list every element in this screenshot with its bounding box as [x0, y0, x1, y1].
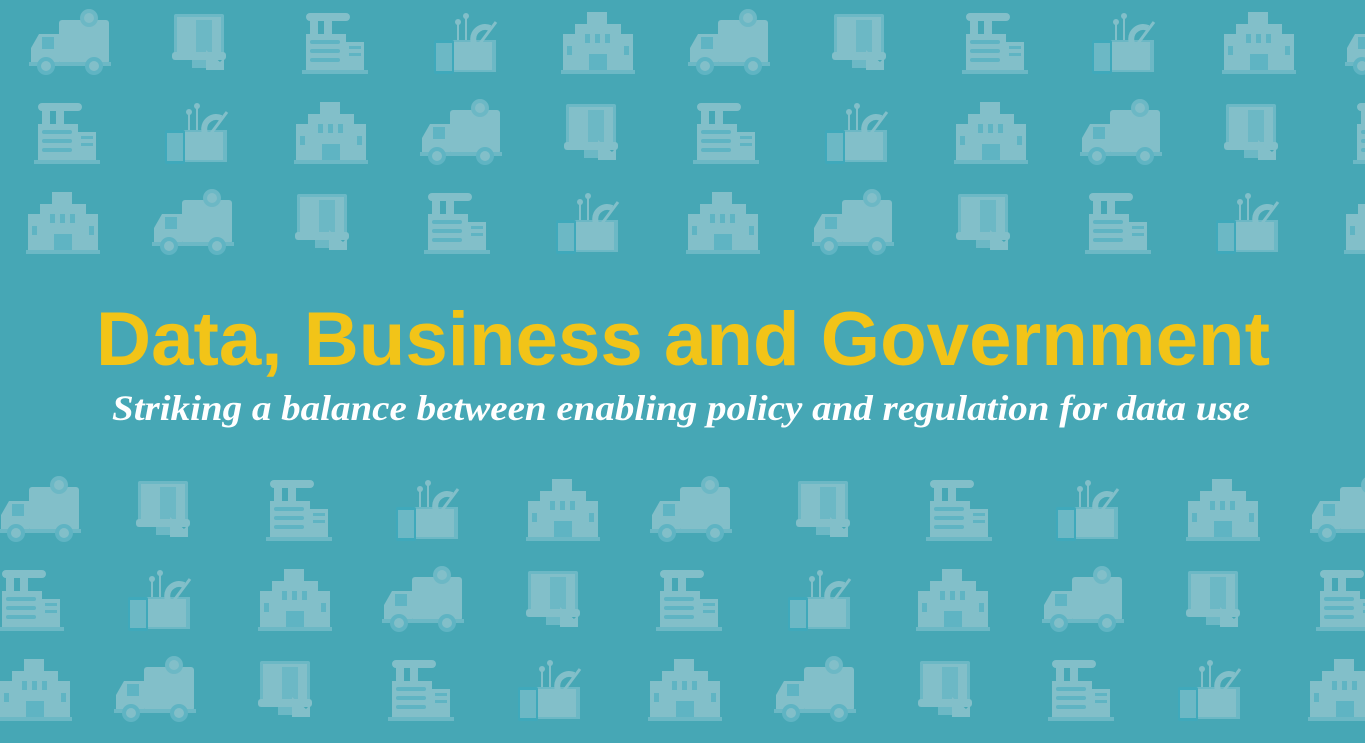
subtitle: Striking a balance between enabling policy and regulation for data use [112, 388, 1250, 428]
background pattern: bottom icons [0, 476, 1365, 722]
title: Data, Business and Government [96, 297, 1270, 382]
background pattern: top icons [26, 9, 1365, 255]
